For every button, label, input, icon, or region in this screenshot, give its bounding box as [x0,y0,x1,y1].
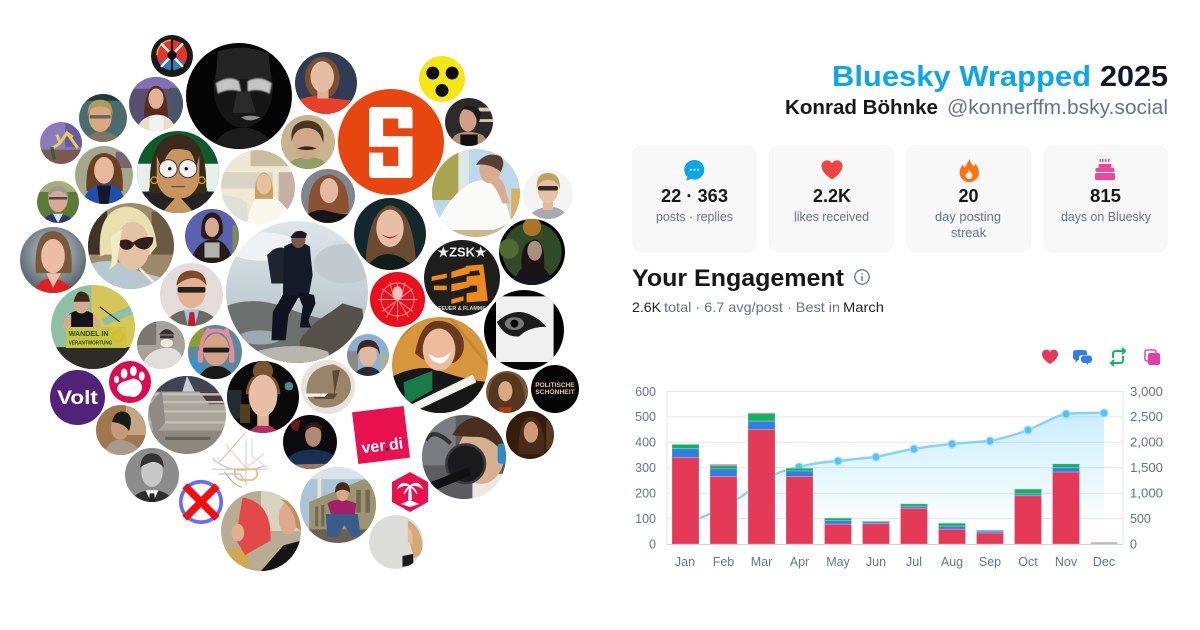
stat card: days on Bluesky: days on Bluesky [1061,210,1152,224]
stat card: posting streak: 20 [958,186,978,206]
stat card: likes received: 2.2K [813,186,851,206]
stat card: posts and replies: 22 · 363 [661,186,728,206]
avatar: speaker at green party podium: VERANTWORTUNG [69,341,113,347]
month labels: Jan [675,555,695,569]
engagement chart [635,385,1163,569]
right axis labels: 2,000 [1130,436,1163,450]
chart legend [1042,348,1160,366]
avatar: man in white shirt [432,149,520,237]
left axis labels: 300 [635,461,656,475]
avatar: woman with plant top [185,209,239,263]
month labels: Nov [1055,555,1078,569]
bar: Feb [710,464,737,544]
avatar: mantis illustration [40,122,82,164]
avatar: hiker on a rock, largest circle [226,221,368,363]
month labels: Dec [1093,555,1115,569]
avatar: woman in forest with black ring [499,219,565,285]
avatar: curly woman in blue blazer [75,146,133,204]
cumulative line [685,413,1104,524]
right axis labels: 2,500 [1130,410,1163,424]
title: Bluesky Wrapped [832,61,1091,93]
avatar: red X over blue circle [178,480,224,524]
logo: ver.di [352,406,410,464]
avatar: person with short dark hair in profile [96,405,146,455]
avatar cluster [20,35,579,571]
month labels: Oct [1018,555,1038,569]
avatar: woman with curly auburn hair [301,169,355,223]
stat card: posting streak [906,145,1031,253]
avatar: man in suit, monochrome [125,448,179,502]
cumulative area [685,413,1104,544]
bar: Nov [1052,464,1080,544]
avatar: laughing woman lying on wood floor [392,317,488,413]
avatar: man in navy shirt on dark background [283,415,337,469]
icon: flame [960,159,979,182]
avatar: black mask portrait [186,43,292,149]
avatar: blonde man with glasses [523,169,573,219]
stacked monthly bars [672,413,1118,544]
bar: Dec [1090,542,1118,544]
month labels: Apr [790,555,809,569]
avatar: ZSK logo: ★ZSK★ [438,245,487,260]
avatar: ZSK logo: FEUER & FLAMME [438,306,486,312]
avatar: man with red tie [160,263,223,326]
avatar: woman with red fan [221,491,301,571]
bar: Jul [900,504,928,544]
avatar: woman in red jacket [20,227,86,293]
legend icon: quotes [1145,350,1160,365]
avatar: woman sitting in front of a building [300,467,376,543]
avatar: Volt logo: Volt [57,387,98,409]
legend icon: reposts [1111,348,1125,366]
right axis labels: 0 [1130,538,1137,552]
stat card: days on Bluesky [1043,145,1168,253]
avatar: older man with glasses [79,94,127,142]
stat card: posting streak: day posting [935,210,1001,224]
left axis labels: 200 [635,486,656,500]
right axis labels: 1,500 [1130,461,1163,475]
left axis labels: 100 [635,512,656,526]
bar: May [824,518,852,544]
left axis labels: 400 [635,436,656,450]
avatar: eye close-up [484,290,564,370]
avatar: red eagle emblem [370,272,425,327]
avatar: curly haired woman [486,371,528,413]
title: 2025 [1100,61,1168,93]
avatar: Politische Schönheit logo: POLITISCHE [535,382,575,389]
avatar: ZSK logo [424,240,500,316]
stat card: posting streak: streak [951,226,987,240]
avatar: man in profile [445,98,493,146]
month labels: May [826,555,851,569]
user name and handle: Konrad Böhnke [785,97,938,119]
avatar: man with moustache [281,115,335,169]
user name and handle: @konnerffm.bsky.social [947,97,1168,119]
icon: speech bubble [684,160,704,180]
user name and handle [785,97,1168,119]
avatar: woman with red hair in purple setting [129,77,183,131]
engagement summary: 2.6K [632,299,662,315]
logo: ver.di: ver.di [361,435,404,457]
left axis labels [635,385,656,552]
avatar: transit map [212,432,268,488]
icon: info [855,270,869,284]
engagement summary [632,299,884,315]
left axis labels: 0 [649,538,656,552]
stat card: likes received [769,145,894,253]
avatar: Politische Schönheit logo: SCHÖNHEIT [535,389,575,396]
avatar: boy with dark hair [347,334,389,376]
right axis labels [1130,385,1163,552]
month labels: Jul [906,555,922,569]
icon: heart [821,160,843,180]
engagement summary: March [843,299,884,315]
avatar: gray haired man [37,181,79,223]
avatar: speaker at green party podium: WANDEL IN [69,330,108,338]
left axis labels: 600 [635,385,656,399]
avatar: blonde person with sunglasses [88,203,174,289]
stat card: likes received: likes received [794,210,869,224]
right axis labels: 3,000 [1130,385,1163,399]
bar: Aug [938,523,966,544]
avatar: man with pink cat ear headset [188,325,242,379]
avatar: emblem [151,35,193,77]
heading: your engagement: Your Engagement [632,265,844,292]
right axis labels: 1,000 [1130,486,1163,500]
legend icon: replies [1073,350,1092,365]
bar: Apr [786,468,813,544]
avatar: Volt logo [50,370,105,425]
month labels [675,555,1115,569]
avatar: yellow three dots [419,56,465,102]
month labels: Mar [751,555,772,569]
avatar: woman with dark brown hair [506,411,554,459]
right axis labels: 500 [1130,512,1151,526]
stat card: posts and replies: posts · replies [656,210,733,224]
bar: Jun [862,521,890,544]
bar: Sep [976,530,1004,544]
avatar: woman at microphone with blue headphones [422,415,506,499]
cumulative data points [795,409,1108,471]
avatar: sculpture [301,360,355,414]
legend icon: likes [1042,350,1058,364]
avatar: woman hidden at edge of gray wall [369,515,423,569]
avatar: speaker at green party podium [51,285,135,369]
month labels: Aug [941,555,963,569]
avatar: Politische Schönheit logo [531,365,579,413]
left axis labels: 500 [635,410,656,424]
avatar: concrete stairs [148,376,226,454]
bar: Oct [1014,489,1042,544]
month labels: Feb [713,555,734,569]
engagement summary: total · 6.7 avg/post · Best in [664,299,840,315]
bar: Mar [748,413,775,544]
stat card: posts and replies [632,145,757,253]
avatar: orange S logo [338,89,444,195]
avatar: smiling woman with long hair [354,198,426,270]
avatar: blonde woman in white [221,150,295,224]
avatar: cartoon woman [137,131,219,213]
avatar: paw logo [109,361,151,403]
bar: Jan [672,444,699,544]
month labels: Jun [866,555,886,569]
avatar: woman with red top [295,52,357,114]
avatar: woman with hair bun [227,361,299,433]
avatar: person in lab suit and mask [137,321,185,369]
month labels: Sep [979,555,1001,569]
icon: cake [1095,159,1115,180]
logo: hexagon palm tree [392,472,428,512]
stat card: days on Bluesky: 815 [1090,186,1121,206]
